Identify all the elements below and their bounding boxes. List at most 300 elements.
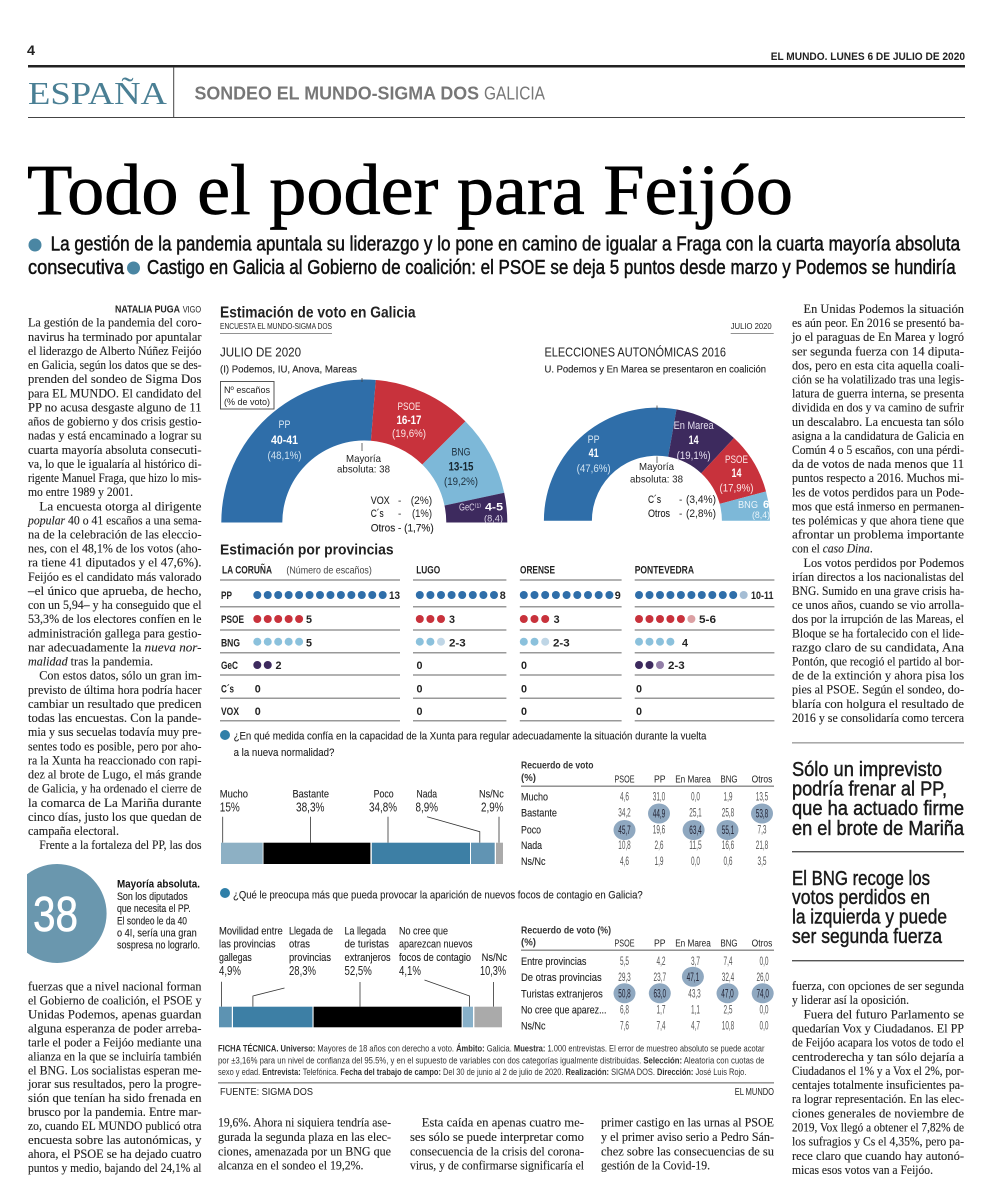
table: vote recall question 2: 29,3	[618, 972, 631, 984]
stacked bar chart: 10,3%	[480, 964, 506, 978]
table: vote recall question 2: 74,0	[756, 988, 769, 1000]
row BNG	[221, 638, 689, 650]
row Cs: C´s	[221, 683, 234, 695]
stacked bar chart: Nada	[416, 788, 438, 800]
parties without seats 2016: -	[679, 495, 682, 506]
section subtitle: SONDEO EL MUNDO-SIGMA DOS	[194, 83, 479, 103]
article text: left column upper: todas las encuestas. Con la pande-	[28, 710, 202, 725]
panel: question 1 trust in Xunta	[220, 730, 774, 868]
pull quote: solo un imprevisto: Sólo un imprevisto	[792, 759, 942, 781]
row Cs	[221, 683, 642, 695]
table: vote recall question 1: 31,0	[653, 792, 665, 804]
label PSOE 2016: PSOE	[725, 454, 748, 466]
table: vote recall question 2: 47,1	[687, 972, 699, 984]
table: vote recall question 1: 63,4	[689, 825, 702, 837]
row VOX: VOX	[221, 706, 240, 718]
table: vote recall question 1: 13,5	[756, 792, 768, 804]
question text	[220, 730, 707, 759]
article text: left column lower: ahora, el PSOE se ha dejado cuatro	[28, 1146, 202, 1161]
panel heading	[220, 305, 774, 334]
label PSOE: 16-17	[396, 413, 422, 427]
section name: ESPAÑA	[28, 76, 167, 111]
table: vote recall question 1: BNG	[720, 774, 738, 785]
article text: left column upper: La gestión de la pandemia del coro-	[28, 315, 202, 330]
article text: right column upper: ser segunda fuerza con 14 diputa-	[792, 343, 964, 358]
provinces heading: Estimación por provincias	[220, 542, 394, 558]
table: vote recall question 2: 7,6	[620, 1020, 629, 1032]
article text: left column lower: zo, cuando EL MUNDO publicó otra	[28, 1118, 202, 1133]
article text: right column upper: es aún peor. En 2016 se presentó ba-	[792, 315, 964, 330]
table: vote recall question 2: 0,0	[760, 1020, 768, 1032]
panel: voting estimate	[220, 305, 774, 535]
article text: bottom column 3: y el primer aviso serio a Pedro Sán-	[601, 1129, 774, 1144]
label PSOE: (19,6%)	[392, 428, 426, 440]
article text: right column lower: ra lograr representación. En las elec-	[792, 1091, 964, 1106]
article text: left column upper: na de la celebración de las eleccio-	[28, 526, 202, 542]
article text: left column lower: puntos y medio, bajando del 24,1% al	[28, 1160, 202, 1175]
stacked bar chart	[220, 788, 504, 864]
question text: a la nueva normalidad?	[234, 747, 334, 759]
article text: left column upper: el liderazgo de Alberto Núñez Feijóo	[28, 343, 202, 358]
panel heading: Estimación de voto en Galicia	[220, 305, 416, 322]
chart: elecciones 2016 semicircle	[544, 345, 770, 521]
label GeC: GeC⁽¹⁾	[459, 503, 481, 514]
table: vote recall question 1: 0,0	[691, 856, 700, 868]
row BNG: 5	[306, 638, 312, 650]
label PSOE 2016: (17,9%)	[720, 483, 754, 495]
article text: left column upper: nes, con el 48,1% de los votos (aho-	[28, 541, 202, 556]
article text: left column lower: fuerzas que a nivel nacional forman	[28, 978, 202, 994]
table: vote recall question 2: 3,7	[691, 956, 700, 968]
article text: right column upper: mos que está inmerso en permanen-	[792, 498, 964, 513]
page number: 4	[27, 42, 35, 58]
stacked bar chart: Movilidad entre	[219, 925, 283, 937]
parties without seats: Otros - (1,7%)	[371, 523, 434, 535]
majority label: absoluta: 38	[337, 464, 390, 476]
article text: left column lower: sión que tenían ha sido frenada en	[28, 1090, 202, 1105]
article text: left column upper: previsto de última hora podría hacer	[28, 682, 202, 697]
row BNG: BNG	[221, 638, 240, 650]
page header	[27, 42, 965, 118]
label BNG 2016: (8,4)	[752, 510, 770, 521]
table: vote recall question 1: 1,9	[654, 856, 664, 868]
table: vote recall question 1: 4,6	[620, 856, 629, 868]
stacked bar chart: 28,3%	[289, 964, 316, 978]
big number circle	[27, 864, 107, 963]
table: vote recall question 1: (%)	[521, 772, 536, 784]
stacked bar chart: 34,8%	[369, 801, 397, 815]
parties without seats 2016	[648, 494, 716, 520]
article text: left column upper: Feijóo es el candidato más valorado	[28, 569, 202, 584]
article text: left column upper: para EL MUNDO. El candidato del	[28, 385, 202, 400]
stacked bar chart: No cree que	[399, 925, 448, 937]
parties without seats: -	[398, 509, 401, 520]
article text: left column lower: alianza en la que se incluiría también	[28, 1048, 202, 1063]
table: vote recall question 1: 44,9	[653, 808, 665, 820]
legend box: (% de voto)	[224, 397, 270, 408]
chart: julio 2020 semicircle: (I) Podemos, IU, Anova, Mareas	[220, 364, 357, 376]
callout text: o 4I, sería una gran	[117, 928, 197, 940]
row GeC	[221, 660, 685, 672]
stacked bar chart: 4,9%	[219, 964, 241, 978]
table: vote recall question 1: Recuerdo de voto	[521, 759, 594, 771]
article text: left column lower: el Gobierno de coalición, el PSOE y	[28, 992, 202, 1008]
label PP 2016: 41	[589, 446, 599, 460]
row VOX: 0	[521, 706, 527, 718]
panel: question 2 new outbreaks	[219, 888, 774, 1032]
majority label: Mayoría	[346, 453, 381, 465]
article text: bottom column 2: virus, y de confirmarse significaría el	[410, 1158, 584, 1173]
article text: left column upper: ra tiene 41 diputados y el 47,6%).	[28, 555, 202, 570]
table: vote recall question 1: 16,6	[722, 840, 734, 852]
stacked bar chart: Llegada de	[289, 925, 333, 937]
pull quote: el BNG recoge: ser segunda fuerza	[792, 926, 943, 948]
table: vote recall question 1: En Marea	[675, 774, 711, 785]
row BNG: 2-3	[553, 638, 570, 650]
article text: right column lower: centajes totalmente insuficientes pa-	[792, 1077, 964, 1092]
article text: right column lower: 2019, Vox llegó a obtener el 7,82% de	[792, 1120, 964, 1134]
table: vote recall question 2: 4,7	[691, 1020, 700, 1032]
label En Marea 2016: (19,1%)	[677, 450, 711, 462]
label BNG 2016	[738, 499, 770, 521]
label BNG 2016: 6	[763, 499, 769, 511]
table: vote recall question 2: 1,1	[691, 1004, 700, 1016]
article text: left column lower: brusco por la pandemia. Entre mar-	[28, 1104, 202, 1119]
label PP 2016: PP	[588, 434, 600, 446]
table: vote recall question 2: Entre provincias	[521, 956, 587, 968]
row PSOE: 3	[554, 614, 560, 626]
table: vote recall question 1: Poco	[521, 824, 541, 836]
article text: left column lower: tarle el poder a Feijóo mediante una	[28, 1034, 202, 1049]
table: vote recall question 2: 1,7	[656, 1004, 666, 1016]
article text: left column upper: años de gobierno y dos crisis gestio-	[28, 414, 202, 428]
article text: left column upper: rigente Manuel Fraga, que hizo lo mis-	[28, 470, 202, 485]
province column headers: LA CORUÑA	[222, 563, 272, 576]
stacked bar chart: 38,3%	[296, 801, 324, 815]
article text: right column lower: Fuera del futuro Parlamento se	[804, 1006, 964, 1021]
stacked bar chart: de turistas	[344, 939, 389, 951]
callout text	[117, 878, 200, 951]
article text: left column upper: PP no acusa desgaste alguno de 11	[28, 399, 202, 414]
article text: right column lower: de Feijóo acapara los votos de todo el	[792, 1035, 964, 1050]
label BNG: 13-15	[448, 460, 474, 474]
table: vote recall question 1: 21,8	[756, 840, 768, 852]
article text: left column upper: popular 40 o 41 escaños a una sema-	[27, 512, 202, 527]
label PP: (48,1%)	[268, 450, 302, 462]
table: vote recall question 2: PSOE	[614, 939, 635, 950]
article text: right column upper: dos por la irrupción de las Mareas, el	[792, 611, 964, 626]
article text: left column upper: cinco días, justo los que quedan de	[28, 809, 202, 824]
table: vote recall question 2: 26,0	[756, 972, 769, 984]
article text: right column lower: centroderecha y tan sólo dejaría a	[792, 1049, 964, 1064]
row Cs: 0	[255, 683, 261, 695]
pull quote: el BNG recoge: la izquierda y puede	[792, 906, 947, 928]
stacked bar chart	[219, 925, 507, 1027]
table: vote recall question 1: 53,8	[756, 808, 768, 820]
table: vote recall question 1: Bastante	[521, 808, 557, 820]
pull quote: solo un imprevisto: que ha actuado firme	[792, 798, 964, 820]
article text: right column upper: razgo claro de su candidata, Ana	[792, 639, 964, 654]
table: vote recall question 1: Ns/Nc	[521, 856, 546, 868]
article text: right column upper: dividida en dos y va camino de sufrir	[792, 400, 965, 415]
article text: right column lower: los sufragios y Cs el 4,35%, pero pa-	[792, 1134, 964, 1149]
article text: right column upper: latura de guerra interna, se presenta	[792, 386, 964, 401]
article text: right column upper	[791, 301, 965, 725]
article text: left column upper: la comarca de La Mariña durante	[28, 795, 202, 810]
stacked bar chart: provincias	[289, 952, 331, 964]
province column headers: LUGO	[416, 564, 441, 576]
label PP: 40-41	[271, 433, 298, 447]
article text: left column upper: –el único que aprueba, de hecho,	[27, 583, 202, 598]
row BNG: 2-3	[449, 638, 466, 650]
technical sheet: por ±3,16% para un nivel de confianza del 95.5%, y en el supuesto de variables con dos categorías igualmente distribuidas. Selección: Aleatoria con cuotas de	[218, 1055, 764, 1065]
row PSOE: 5-6	[699, 614, 716, 626]
stacked bar chart: gallegas	[219, 952, 252, 964]
row PP: 9	[615, 590, 621, 602]
stacked bar chart: Ns/Nc	[479, 788, 504, 800]
article text: bottom column 2	[410, 1114, 584, 1173]
label BNG: BNG	[452, 447, 470, 459]
article text: right column lower: fuerza, con opciones de ser segunda	[792, 978, 964, 993]
label En Marea 2016: En Marea	[674, 420, 714, 432]
technical sheet	[218, 1044, 774, 1098]
article text: right column upper: con el caso Dina.	[792, 541, 873, 556]
article text: left column upper: administración gallega para gestio-	[28, 625, 202, 640]
table: vote recall question 1: 45,7	[618, 825, 631, 837]
article text: left column lower: alguna esperanza de poder arreba-	[28, 1020, 202, 1035]
article text: bottom column 1: 19,6%. Ahora ni siquiera tendría ase-	[218, 1114, 391, 1130]
article text: left column upper: en Galicia, según los datos que se des-	[28, 357, 202, 372]
byline: NATALIA PUGA	[115, 304, 180, 316]
technical sheet: FICHA TÉCNICA. Universo: Mayores de 18 años con derecho a voto. Ámbito: Galicia. Muestra: 1.000 entrevistas. El error de muestreo absoluto se puede acotar	[218, 1044, 764, 1054]
table: vote recall question 1: 55,1	[722, 825, 734, 837]
table: vote recall question 2: 23,7	[654, 972, 666, 984]
stacked bar chart: Poco	[374, 788, 394, 800]
article text: bottom column 2: Esta caída en apenas cuatro me-	[422, 1114, 584, 1130]
article text: right column lower: micas esos votos van a Feijóo.	[792, 1162, 933, 1177]
label GeC: 4-5	[485, 502, 503, 514]
label En Marea 2016: 14	[689, 433, 699, 447]
parties without seats 2016: Otros	[648, 508, 670, 520]
article text: left column upper: ra la Xunta ha reaccionado con rapi-	[28, 752, 202, 767]
article text: right column upper: da de votos de nada menos que 11	[792, 456, 964, 471]
table: vote recall question 1: 10,8	[618, 840, 631, 852]
legend box	[220, 382, 274, 409]
article text: left column lower: Unidas Podemos, apenas guardan	[28, 1006, 202, 1021]
table: vote recall question 2: No cree que aparez...	[521, 1004, 606, 1016]
question text: ¿Qué le preocupa más que pueda provocar la aparición de nuevos focos de contagio en Galicia?	[233, 889, 643, 901]
label PSOE: PSOE	[398, 401, 420, 413]
article text: right column upper: ce unos años, cuando se vio arrolla-	[792, 597, 964, 612]
table: vote recall question 1: Mucho	[521, 792, 548, 804]
article text: right column lower: quedarían Vox y Ciudadanos. El PP	[792, 1020, 964, 1036]
article text: bottom column 1: gurada la segunda plaza en las elec-	[218, 1129, 391, 1144]
row GeC: 0	[521, 660, 527, 672]
table: vote recall question 1: 0,6	[724, 856, 732, 868]
stacked bar chart: 15%	[220, 801, 240, 815]
row GeC: 0	[416, 660, 422, 672]
province column headers: PONTEVEDRA	[635, 564, 694, 576]
row PP: PP	[221, 590, 232, 602]
table: vote recall question 1: 19,6	[653, 824, 665, 836]
table: vote recall question 1	[521, 759, 774, 868]
article text: right column upper: Los votos perdidos por Podemos	[804, 555, 964, 570]
callout text: que necesita el PP.	[117, 903, 191, 915]
article text: left column upper: cuarta mayoría absoluta consecuti-	[28, 442, 202, 457]
source line	[220, 1087, 774, 1098]
article text: right column upper: puntos respecto a 2016. Muchos mi-	[792, 470, 964, 485]
table: vote recall question 1: 25,8	[722, 808, 734, 820]
article text: right column upper: jo el paraguas de En Marea y logró	[791, 329, 964, 344]
chart: julio 2020 semicircle	[220, 346, 507, 535]
article text: right column upper: Común 4 o 5 escaños, con una pérdi-	[792, 442, 964, 457]
big number circle: 38	[33, 888, 78, 942]
article text: right column upper: afrontar un problema importante	[792, 527, 964, 542]
article text: left column upper: malidad tras la pandemia.	[28, 654, 153, 669]
article text: right column upper: tes polémicas y que ahora tiene que	[792, 512, 964, 528]
article text: bottom column 1: alcanza en el sondeo el 19,2%.	[218, 1158, 364, 1173]
row GeC: GeC	[221, 660, 238, 672]
majority label 2016: Mayoría	[639, 461, 674, 473]
row VOX: 0	[255, 706, 261, 718]
table: vote recall question 2: BNG	[720, 939, 738, 950]
table: vote recall question 1: 25,1	[689, 808, 702, 820]
article text: left column upper: 53,3% de los electores confíen en le	[28, 611, 202, 626]
row Cs: 0	[521, 683, 527, 695]
article text: left column lower: encuesta sobre las autonómicas, y	[28, 1132, 202, 1147]
row PSOE: 5	[306, 614, 312, 626]
label BNG: (19,2%)	[444, 476, 478, 488]
byline: VIGO	[183, 305, 201, 315]
province column headers: (Número de escaños)	[286, 565, 372, 576]
province column headers: ORENSE	[520, 564, 555, 576]
table: vote recall question 2: Otros	[752, 939, 772, 950]
table: vote recall question 1: 11,5	[689, 840, 702, 852]
article text: left column upper: cambiar un resultado que predicen	[28, 696, 202, 711]
pull quote: el BNG recoge: votos perdidos en	[792, 887, 930, 909]
label PP	[268, 419, 302, 462]
article text: bottom column 1	[218, 1114, 391, 1173]
row GeC: 2-3	[668, 660, 685, 672]
majority label 2016	[630, 461, 683, 486]
table: vote recall question 2: 50,8	[618, 988, 631, 1000]
article text: left column upper	[27, 315, 202, 852]
table: vote recall question 1: 1,9	[724, 792, 732, 804]
table: vote recall question 1: PSOE	[614, 774, 635, 785]
stacked bar chart: 4,1%	[399, 964, 421, 978]
article text: left column upper: de Galicia, y ha ordenado el cierre de	[28, 781, 202, 796]
table: vote recall question 1: PP	[654, 774, 666, 785]
article text: right column upper: Bloque se ha fortalecido con el lide-	[792, 625, 964, 640]
chart: elecciones 2016 semicircle: U. Podemos y En Marea se presentaron en coalición	[544, 364, 766, 376]
row GeC: 2	[276, 660, 282, 672]
majority label	[337, 453, 390, 476]
article text: right column lower: ciones generales de noviembre de	[792, 1105, 964, 1120]
table: vote recall question 2: 7,4	[724, 956, 733, 968]
table: vote recall question 1: 3,5	[758, 856, 766, 868]
article text: bottom column 2: consecuencia de la crisis del corona-	[410, 1143, 584, 1158]
row VOX	[221, 706, 642, 718]
article text: left column upper: va, lo que le igualaría al histórico di-	[28, 456, 202, 471]
row PSOE: PSOE	[221, 614, 244, 626]
article text: right column upper: blaría con holgura el resultado de	[792, 696, 964, 711]
row PP	[221, 590, 774, 602]
chart: julio 2020 semicircle: JULIO DE 2020	[220, 346, 301, 360]
article text: left column upper: Con estos datos, sólo un gran im-	[39, 668, 201, 683]
label GeC: (8,4)	[484, 514, 503, 525]
majority label 2016: absoluta: 38	[630, 474, 683, 486]
article text: right column upper: dos, pero en esta cita aquella coali-	[792, 357, 964, 372]
label En Marea 2016	[674, 420, 714, 462]
table: vote recall question 2: 5,5	[620, 956, 629, 968]
table: vote recall question 2: 32,4	[722, 972, 735, 984]
table: vote recall question 1: Nada	[521, 840, 543, 852]
article text: left column lower: el BNG. Los socialistas esperan me-	[28, 1062, 202, 1077]
article text: bottom column 3	[601, 1114, 774, 1173]
table: vote recall question 1: 0,0	[691, 792, 700, 804]
label BNG 2016: BNG	[738, 499, 758, 511]
callout text: sospresa no lograrlo.	[117, 939, 200, 951]
pull quote: solo un imprevisto: en el brote de Mariña	[792, 818, 965, 840]
parties without seats 2016: C´s	[648, 494, 661, 506]
pull quote: solo un imprevisto	[792, 759, 965, 840]
table: vote recall question 2: En Marea	[675, 939, 711, 950]
panel: provinces	[220, 542, 774, 721]
row PP: 8	[500, 590, 506, 602]
label PSOE 2016	[720, 454, 754, 495]
panel heading: JULIO 2020	[731, 322, 772, 331]
row PP: 10-11	[751, 590, 774, 602]
stacked bar chart: extranjeros	[344, 952, 391, 964]
article text: right column upper: En Unidas Podemos la situación	[804, 301, 964, 316]
table: vote recall question 2: 2,5	[724, 1004, 732, 1016]
label PP: PP	[278, 419, 290, 431]
parties without seats: (1%)	[412, 508, 432, 520]
table: vote recall question 2: PP	[654, 939, 666, 950]
table: vote recall question 2: De otras provincias	[521, 972, 602, 984]
table: vote recall question 2: (%)	[521, 937, 536, 949]
subheadline	[28, 234, 961, 279]
parties without seats	[371, 495, 434, 535]
row PP: 13	[389, 590, 400, 602]
technical sheet: sexo y edad. Entrevista: Telefónica. Fecha del trabajo de campo: Del 30 de junio al 2 de julio de 2020. Realización: SIGMA DOS. Dirección: José Luis Rojo.	[218, 1067, 746, 1077]
article text: left column upper: dez al brote de Lugo, el más grande	[28, 766, 202, 782]
callout text: Mayoría absoluta.	[117, 878, 200, 890]
stacked bar chart: Mucho	[220, 788, 248, 800]
article text: left column upper: mia y sus secuelas todavía muy pre-	[28, 724, 202, 739]
province column headers	[222, 563, 694, 576]
article text: left column upper: campaña electoral.	[28, 823, 119, 838]
callout text: Son los diputados	[117, 891, 188, 903]
table: vote recall question 2: Ns/Nc	[521, 1020, 546, 1032]
parties without seats: C´s	[371, 508, 384, 520]
stacked bar chart: otras	[289, 939, 310, 951]
parties without seats 2016: -	[679, 509, 682, 520]
table: vote recall question 1: 2,6	[654, 840, 664, 852]
article text: left column upper: prenden del sondeo de Sigma Dos	[28, 371, 202, 386]
table: vote recall question 2: 0,0	[760, 1004, 768, 1016]
table: vote recall question 2: 63,0	[654, 988, 666, 1000]
article text: right column upper: 2016 y se consolidaría como tercera	[792, 710, 964, 725]
article text: right column upper: de de la extinción y ahora pisa los	[792, 668, 964, 683]
table: vote recall question 2	[521, 924, 774, 1032]
article text: left column upper: Frente a la fortaleza del PP, las dos	[39, 837, 201, 852]
row Cs: 0	[416, 683, 422, 695]
source line: FUENTE: SIGMA DOS	[220, 1087, 313, 1098]
stacked bar chart: 8,9%	[416, 801, 438, 815]
article text: bottom column 3: primer castigo en las urnas al PSOE	[601, 1114, 774, 1130]
parties without seats: -	[398, 496, 401, 507]
